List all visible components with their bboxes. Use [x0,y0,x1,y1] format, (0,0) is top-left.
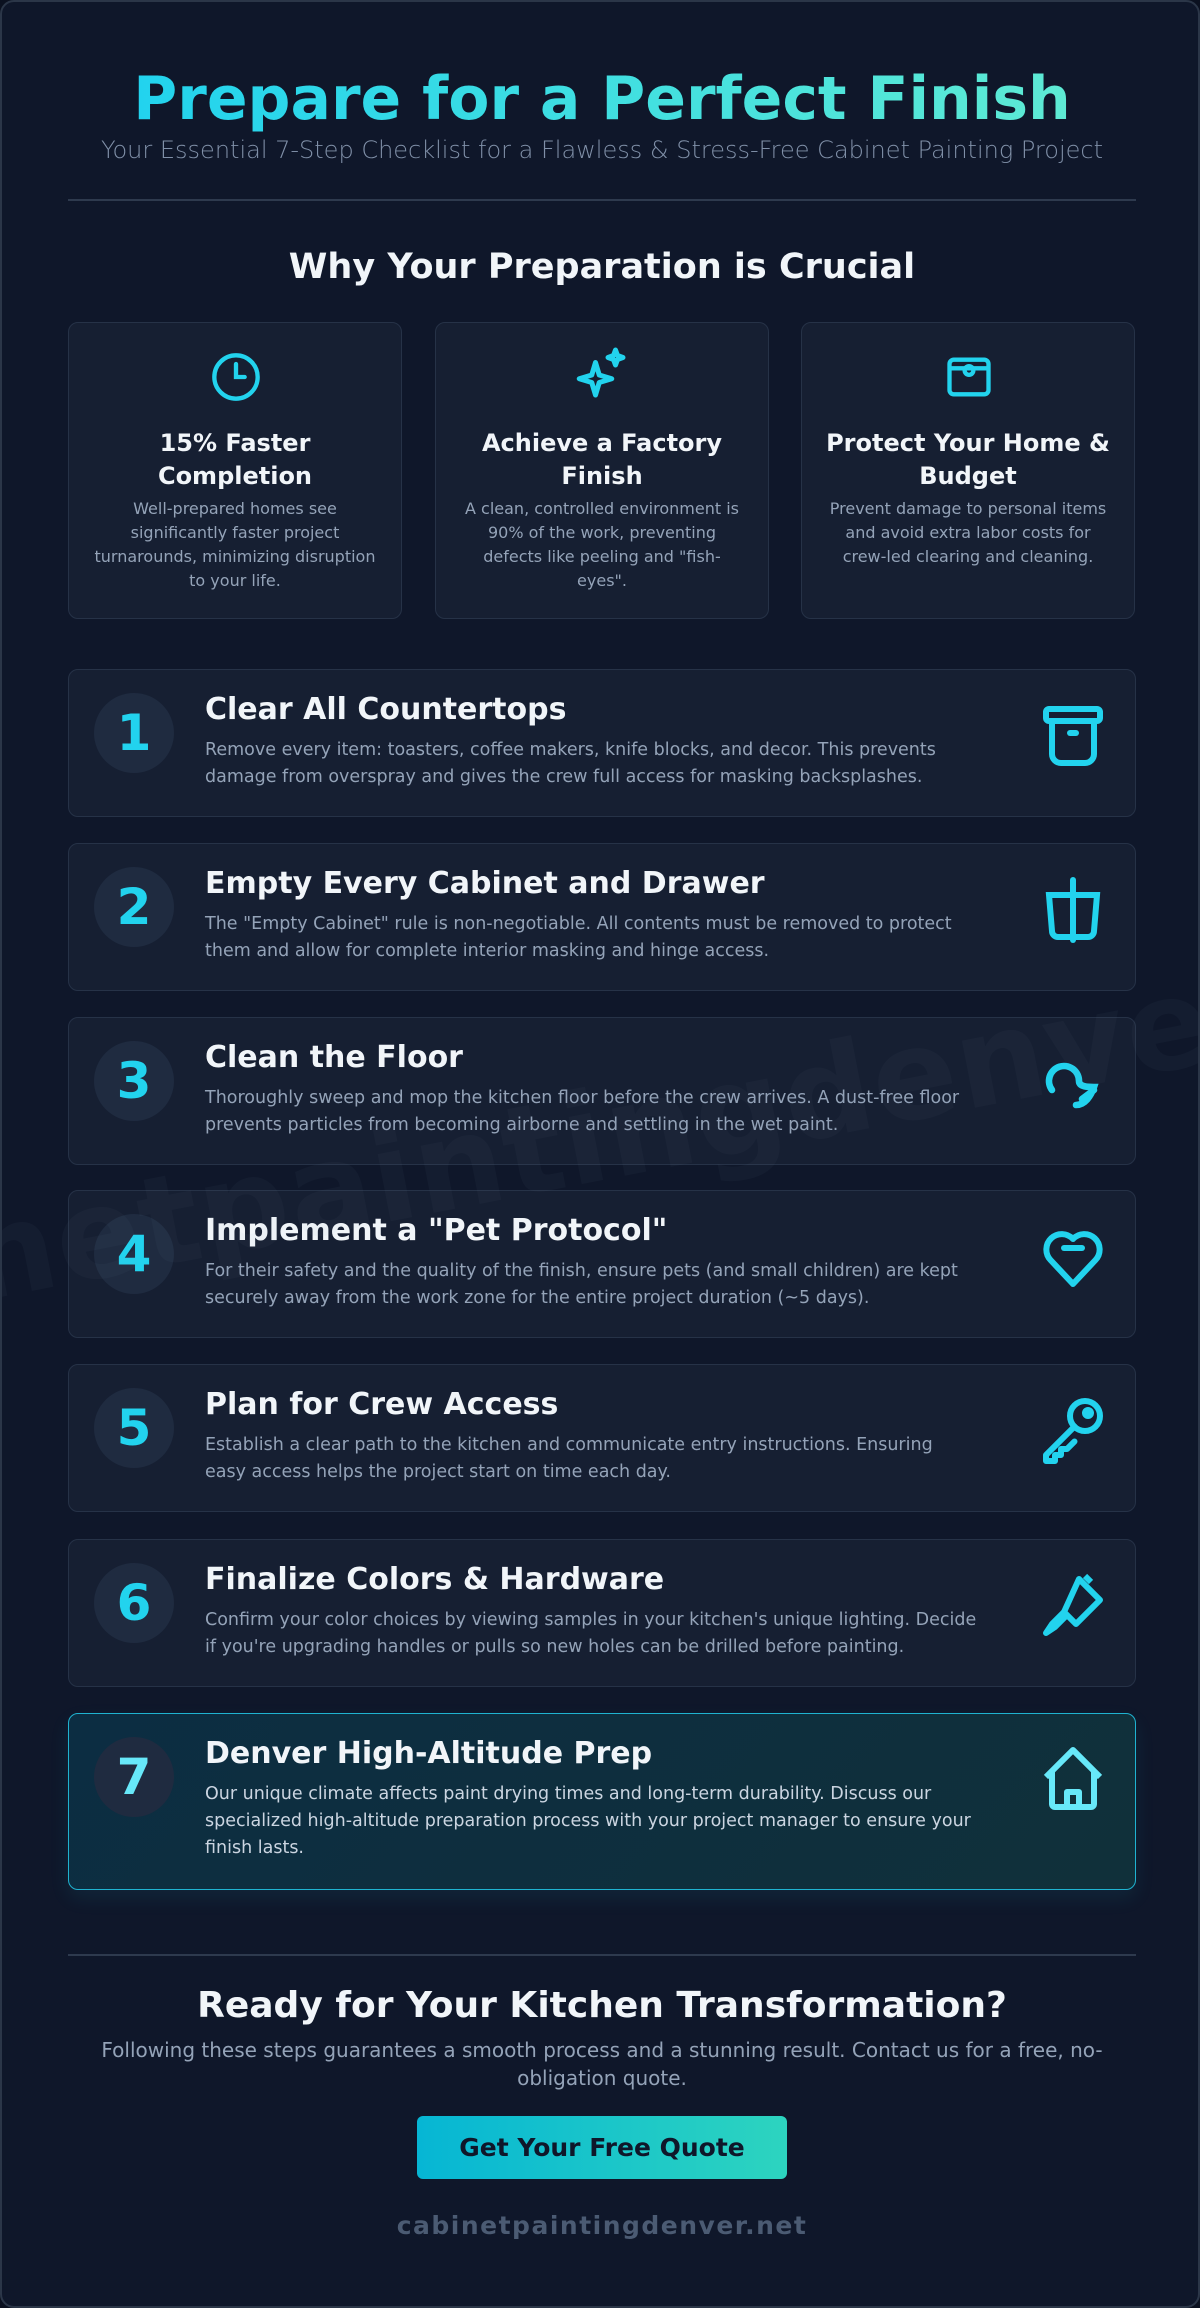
icon: heart [1043,1231,1103,1287]
step 4 [68,1190,1136,1338]
step 6: Finalize Colors & Hardware [205,1562,664,1597]
step 1: Clear All Countertops [205,692,566,727]
step 4: Implement a "Pet Protocol" [205,1213,667,1248]
step 3: Thoroughly sweep and mop the kitchen floor before the crew arrives. A dust-free floor prevents particles from becoming airborne and settling in the wet paint. [205,1088,959,1135]
panel: factory finish: Achieve a Factory Finish [482,429,722,490]
step 1: Remove every item: toasters, coffee makers, knife blocks, and decor. This prevents damage from overspray and gives the crew full access for masking backsplashes. [205,740,936,787]
button [417,2116,787,2179]
step 3: Clean the Floor [205,1040,463,1075]
footer url: cabinetpaintingdenver.net [397,2211,807,2240]
step 7 highlighted: 7 [117,1748,151,1806]
panel: faster [68,322,402,619]
panel: factory finish: A clean, controlled environment is 90% of the work, preventing defects like peeling and "fish-eyes". [465,499,739,590]
icon: box [1043,706,1103,766]
subtitle: Your Essential 7-Step Checklist for a Flawless & Stress-Free Cabinet Painting Project [101,136,1103,164]
icon: broom curl [1046,1062,1098,1108]
icon: house [1044,1747,1102,1810]
step 6: Confirm your color choices by viewing samples in your kitchen's unique lighting. Decide if you're upgrading handles or pulls so new holes can be drilled before painting. [205,1610,976,1657]
step 5: Establish a clear path to the kitchen and communicate entry instructions. Ensuring easy access helps the project start on time each day. [205,1435,933,1482]
icon: sparkles [576,348,626,398]
step 1 [68,669,1136,817]
icon: key [1043,1398,1103,1464]
cta text: Following these steps guarantees a smooth process and a stunning result. Contact us for a free, no-obligation quote. [101,2038,1103,2090]
panel: protect [801,322,1135,619]
step 2: Empty Every Cabinet and Drawer [205,866,765,901]
cta heading: Ready for Your Kitchen Transformation? [197,1985,1007,2026]
icon: basket [1046,877,1100,943]
step 2: The "Empty Cabinet" rule is non-negotiable. All contents must be removed to protect them and allow for complete interior masking and hinge access. [205,914,952,961]
step 3: 3 [117,1052,151,1110]
title: Prepare for a Perfect Finish [133,64,1071,134]
heading: why: Why Your Preparation is Crucial [289,247,915,287]
step 4: 4 [117,1225,151,1283]
step 5: Plan for Crew Access [205,1387,558,1422]
panel: factory finish [435,322,769,619]
panel: protect: Prevent damage to personal items and avoid extra labor costs for crew-led clearing and cleaning. [830,499,1106,566]
icon: safe box [947,358,991,396]
step 4: For their safety and the quality of the finish, ensure pets (and small children) are kept securely away from the work zone for the entire project duration (~5 days). [205,1261,958,1308]
panel: protect: Protect Your Home & Budget [826,429,1110,490]
step 7 highlighted [68,1713,1136,1890]
step 1: 1 [117,704,151,762]
step 6 [68,1539,1136,1687]
step 2 [68,843,1136,991]
panel: faster: 15% Faster Completion [158,429,312,490]
panel: faster: Well-prepared homes see significantly faster project turnarounds, minimizing disruption to your life. [95,499,375,590]
icon: brush [1043,1574,1103,1636]
step 6: 6 [117,1574,151,1632]
step 7 highlighted: Our unique climate affects paint drying times and long-term durability. Discuss our specialized high-altitude preparation process with your project manager to ensure your finish lasts. [205,1784,971,1858]
step 3 [68,1017,1136,1165]
step 5: 5 [117,1399,151,1457]
step 2: 2 [117,878,151,936]
icon: clock [212,353,260,401]
step 7 highlighted: Denver High-Altitude Prep [205,1736,652,1771]
button: Get Your Free Quote [459,2133,745,2162]
step 5 [68,1364,1136,1512]
